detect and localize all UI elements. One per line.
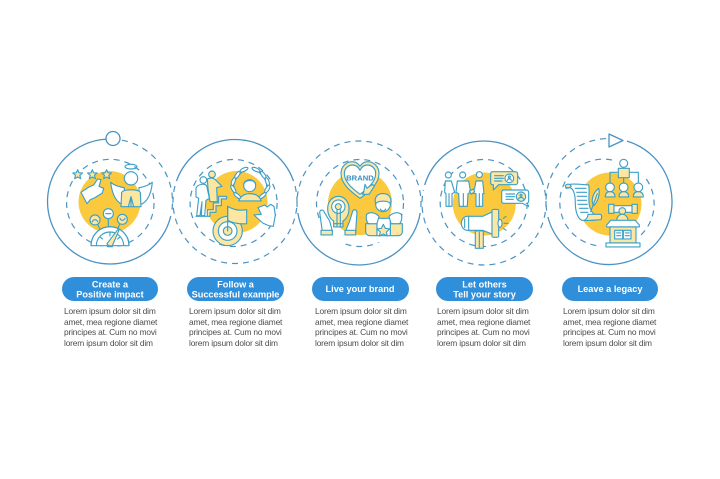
text block 2: amet, mea regione diamet — [189, 317, 283, 327]
icon: open hands — [320, 210, 357, 235]
panel: live your brand — [297, 141, 421, 265]
outer ring 1 — [48, 139, 172, 264]
text block 2: Lorem ipsum dolor sit dim — [189, 306, 281, 316]
panel: follow a successful example — [173, 140, 297, 264]
icon: chat bubble one — [491, 172, 518, 190]
icon: megaphone — [461, 209, 508, 248]
yellow disc 2 — [206, 171, 268, 233]
label pill 2 — [187, 277, 284, 301]
text block 5: principes at. Cum no movi — [563, 327, 656, 337]
inner dashed ring 1 — [67, 159, 154, 247]
inner dashed ring 5 — [560, 159, 654, 246]
text block 3: lorem ipsum dolor sit dim — [315, 338, 404, 348]
text block 2: principes at. Cum no movi — [189, 327, 282, 337]
icon: person with star — [366, 194, 402, 236]
label pill 2: Successful example — [192, 290, 279, 300]
icon: mood faces — [90, 209, 127, 230]
icon group 2 — [196, 166, 275, 246]
icon: pointing hand — [81, 179, 104, 204]
icon group 4 — [445, 172, 529, 248]
white floor under icons — [318, 235, 405, 242]
outer ring 3 — [297, 141, 421, 265]
text block 4: Lorem ipsum dolor sit dim — [437, 306, 529, 316]
text block 3 — [315, 306, 409, 348]
icon: person climbing back — [207, 171, 222, 202]
label pill 3 — [312, 277, 409, 301]
text block 5 — [563, 306, 657, 348]
icon: stars — [73, 170, 111, 179]
outer ring 5 — [546, 139, 672, 265]
text block 5: Lorem ipsum dolor sit dim — [563, 306, 655, 316]
arrow marker — [609, 134, 623, 147]
label pill 3: Live your brand — [326, 284, 394, 294]
label pill 4: Tell your story — [453, 290, 517, 300]
icon: gear light bulb — [328, 196, 349, 227]
label pill 1 — [62, 277, 158, 301]
icon: org chart — [605, 159, 643, 197]
text block 3: amet, mea regione diamet — [315, 317, 409, 327]
label pill 4: Let others — [462, 280, 507, 290]
icon: angel — [111, 164, 152, 207]
icon group 5 — [565, 159, 643, 247]
text block 3: Lorem ipsum dolor sit dim — [315, 306, 407, 316]
inner dashed ring 4 — [440, 160, 527, 246]
yellow disc 4 — [453, 172, 516, 236]
text block 5: amet, mea regione diamet — [563, 317, 657, 327]
yellow disc 5 — [578, 172, 642, 236]
text block 1: amet, mea regione diamet — [64, 317, 158, 327]
label pill 5 — [562, 277, 658, 301]
text block 2 — [189, 306, 283, 348]
text block 4: lorem ipsum dolor sit dim — [437, 338, 526, 348]
text block 2: lorem ipsum dolor sit dim — [189, 338, 278, 348]
icon: lectern with book — [606, 220, 640, 247]
label pill 1: Positive impact — [76, 290, 144, 300]
text block 5: lorem ipsum dolor sit dim — [563, 338, 652, 348]
label pill 4 — [436, 277, 533, 301]
icon group 1 — [73, 164, 152, 246]
icon: hand — [254, 204, 275, 226]
label pill 5: Leave a legacy — [578, 284, 643, 294]
inner dashed ring 3 — [316, 160, 404, 246]
icon: speedometer — [91, 227, 129, 246]
text block 1: lorem ipsum dolor sit dim — [64, 338, 153, 348]
text block 1 — [64, 306, 158, 348]
panel: leave a legacy — [546, 134, 672, 265]
icon: scroll and quill — [565, 184, 602, 221]
inner dashed ring 2 — [190, 160, 277, 246]
panel: let others tell your story — [422, 141, 546, 265]
icon: person climbing front — [196, 177, 209, 216]
text block 3: principes at. Cum no movi — [315, 327, 408, 337]
text block 4 — [437, 306, 531, 348]
icon: award hands — [609, 204, 637, 221]
text block 1: Lorem ipsum dolor sit dim — [64, 306, 156, 316]
label pill 1: Create a — [92, 280, 129, 290]
outer ring 4 — [422, 141, 546, 265]
text block 4: principes at. Cum no movi — [437, 327, 530, 337]
marker circle — [106, 132, 120, 146]
text block 4: amet, mea regione diamet — [437, 317, 531, 327]
icon: three people — [445, 172, 484, 206]
label pill 2: Follow a — [217, 280, 255, 290]
icon: chat bubble two — [502, 190, 529, 207]
icon: stairs — [196, 196, 227, 216]
icon: target with flag — [213, 206, 247, 246]
text block 1: principes at. Cum no movi — [64, 327, 157, 337]
yellow disc 3 — [328, 171, 392, 235]
yellow disc 1 — [78, 171, 140, 233]
brand label: BRAND — [346, 174, 374, 183]
outer ring 2 — [173, 140, 297, 264]
icon: laurel wreath person — [230, 166, 271, 201]
panel: create a positive impact — [48, 132, 172, 264]
